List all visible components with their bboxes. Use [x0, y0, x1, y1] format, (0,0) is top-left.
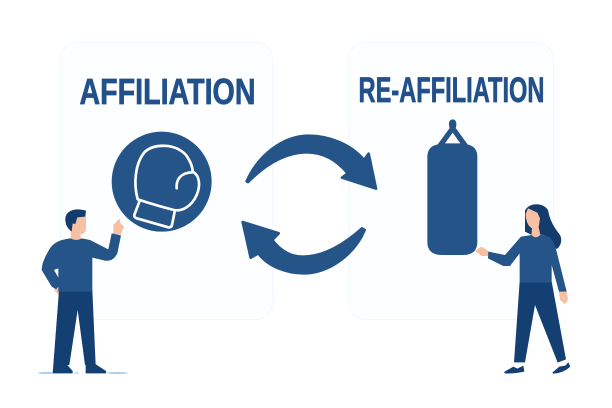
bent hand on hip	[54, 287, 66, 298]
arrow: bottom clockwise	[243, 222, 365, 273]
figure: man pointing	[38, 209, 128, 374]
shoes	[504, 362, 570, 374]
hanging hand	[559, 292, 568, 304]
icon: boxing glove in circle	[112, 132, 212, 232]
heading: affiliation: AFFILIATION	[80, 71, 256, 112]
pointing hand	[113, 219, 124, 235]
hair	[65, 209, 86, 231]
hair	[525, 204, 561, 249]
panel: affiliation	[60, 42, 272, 320]
head	[71, 217, 86, 240]
icon: punching bag	[427, 119, 477, 255]
sweater	[42, 233, 121, 292]
icon: cycle arrows	[243, 136, 376, 273]
ground shadow	[38, 372, 128, 374]
bag body	[427, 144, 477, 255]
open hand	[475, 247, 489, 256]
bag strap	[437, 119, 468, 145]
sweater	[488, 234, 567, 292]
trousers	[514, 282, 566, 363]
shoes	[53, 364, 106, 373]
trousers	[53, 290, 96, 365]
arrow: top clockwise	[247, 136, 376, 189]
face and neck	[526, 208, 541, 238]
figure: woman gesturing	[475, 204, 570, 374]
panel: re-affiliation	[348, 42, 554, 320]
